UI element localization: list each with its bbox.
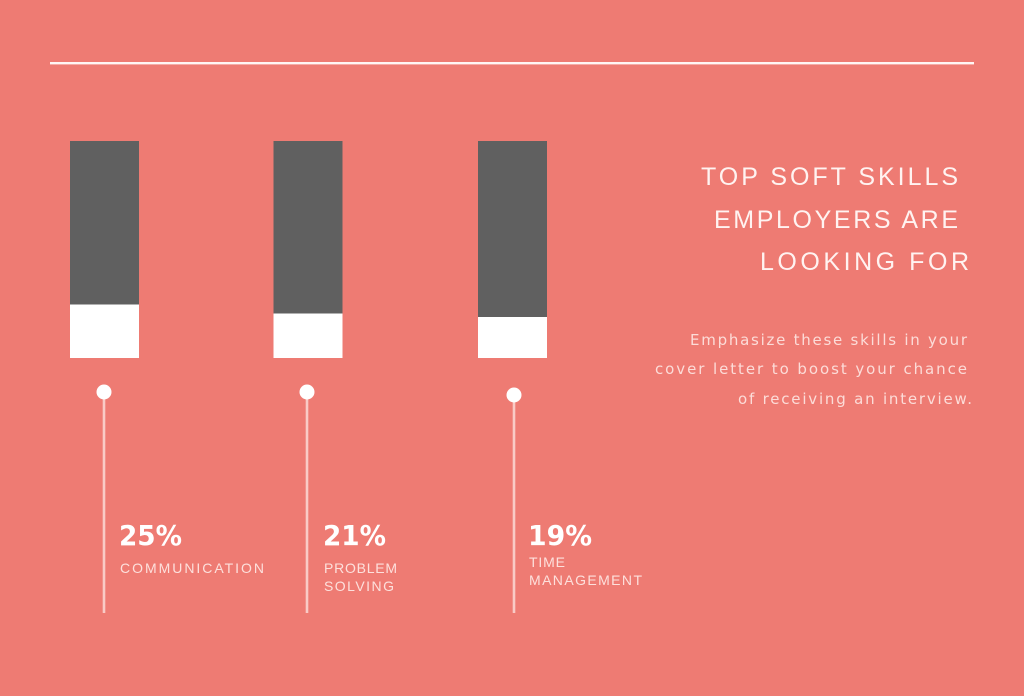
- stat: 21% problem solving: PROBLEM: [324, 560, 397, 576]
- stat: 19% time management: MANAGEMENT: [529, 572, 642, 588]
- stat: 19% time management: TIME: [529, 554, 565, 570]
- title: [701, 163, 969, 276]
- stat: 25% communication: [119, 519, 264, 576]
- stat: 19% time management: [528, 519, 642, 588]
- stat: 21% problem solving: [323, 519, 397, 594]
- pin marker: time management: [506, 388, 522, 613]
- description text: Emphasize these skills in your: [690, 331, 968, 349]
- description text: of receiving an interview.: [738, 390, 972, 408]
- title: TOP SOFT SKILLS: [701, 163, 958, 191]
- bar chart: communication: [70, 141, 139, 358]
- pin marker: problem solving: [300, 384, 314, 613]
- stat: 25% communication: 25%: [119, 519, 182, 552]
- stat: 21% problem solving: SOLVING: [324, 578, 394, 594]
- stat: 19% time management: 19%: [528, 519, 592, 552]
- description text: [655, 331, 972, 408]
- stat: 21% problem solving: 21%: [323, 519, 386, 552]
- title: EMPLOYERS ARE: [714, 206, 958, 234]
- bar chart: problem solving: [274, 141, 342, 358]
- bar chart: time management: [478, 141, 547, 358]
- description text: cover letter to boost your chance: [655, 360, 967, 378]
- title: LOOKING FOR: [760, 248, 969, 276]
- pin marker: communication: [96, 384, 112, 613]
- stat: 25% communication: COMMUNICATION: [120, 560, 264, 576]
